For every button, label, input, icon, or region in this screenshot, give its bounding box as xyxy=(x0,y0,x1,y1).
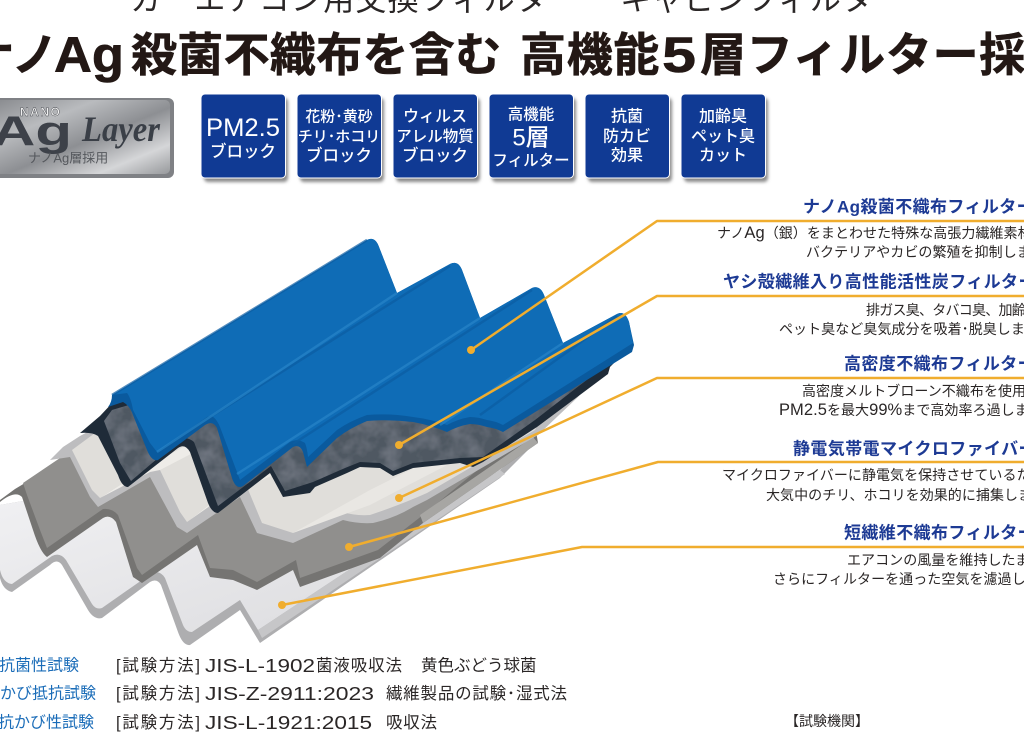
badge: odor: 加齢臭 xyxy=(699,106,747,126)
testing organization label: 【試験機関】 xyxy=(785,713,869,729)
test row 2: 繊維製品の試験･湿式法 xyxy=(386,684,567,703)
badge: pollen: 花粉･黄砂 xyxy=(305,108,373,126)
filter illustration xyxy=(0,239,634,645)
test list xyxy=(0,656,567,733)
layer 5: short fiber nonwoven xyxy=(0,446,530,645)
badge: pollen: チリ･ホコリ xyxy=(298,128,380,146)
badge: five layers xyxy=(489,94,576,182)
title: 殺菌不織布を含む xyxy=(131,29,501,81)
subtitle xyxy=(130,0,906,18)
callout: nano Ag nonwoven xyxy=(717,198,1024,260)
callout: high density: 高密度メルトブローン不織布を使用 xyxy=(802,383,1024,399)
test row 1: 抗菌性試験 xyxy=(0,656,79,674)
badge: antibacterial xyxy=(585,94,672,182)
badge: Nano Ag Layer silver plate: ナノAg層採用 xyxy=(28,150,108,166)
title: 5 xyxy=(662,27,696,83)
test row 1: [試験方法] xyxy=(116,656,200,675)
layer 1: nano Ag nonwoven xyxy=(108,239,634,487)
callout: microfiber xyxy=(722,440,1024,503)
badge: Nano Ag Layer silver plate xyxy=(0,98,174,178)
test row 1 xyxy=(0,656,536,676)
badge: five layers: 5層 xyxy=(512,124,550,152)
callout: activated carbon xyxy=(723,272,1024,337)
badge: Nano Ag Layer silver plate: Layer xyxy=(81,109,161,149)
test row 3: [試験方法] xyxy=(116,713,200,732)
badge: odor xyxy=(681,94,768,182)
callout: short fiber xyxy=(773,524,1024,587)
layer 3: high density nonwoven xyxy=(50,340,600,543)
leader line 1 xyxy=(467,221,1024,354)
test row 1: 黄色ぶどう球菌 xyxy=(421,656,536,675)
test row 1: 菌液吸収法 xyxy=(316,656,402,675)
test row 2 xyxy=(0,684,567,704)
test row 2: [試験方法] xyxy=(116,684,200,703)
badge: odor: ペット臭 xyxy=(691,126,755,146)
layer 2: activated carbon xyxy=(80,320,632,513)
badge: virus: ウィルス xyxy=(403,108,467,126)
title xyxy=(0,27,1024,83)
badge: virus: アレル物質 xyxy=(396,128,474,146)
badge: Nano Ag Layer silver plate: NANO xyxy=(20,105,61,119)
badge: virus: ブロック xyxy=(402,145,468,165)
badge: virus xyxy=(393,94,480,182)
leader line 4 xyxy=(345,462,1024,551)
test row 3: 抗かび性試験 xyxy=(0,714,94,732)
feature badges xyxy=(201,94,768,182)
test row 1: JIS-L-1902 xyxy=(205,656,315,676)
test row 3 xyxy=(0,713,437,733)
title: Ag xyxy=(54,27,124,83)
badge: antibacterial: 防カビ xyxy=(603,128,651,146)
leader line 5 xyxy=(278,547,1024,609)
badge: antibacterial: 抗菌 xyxy=(611,108,643,126)
badge: five layers: フィルター xyxy=(492,152,570,170)
badge: antibacterial: 効果 xyxy=(611,146,643,164)
test row 3: JIS-L-1921:2015 xyxy=(205,713,372,733)
leader line 3 xyxy=(395,378,1024,502)
badge: PM2.5 xyxy=(201,94,288,182)
title: 高機能 xyxy=(520,29,660,81)
leader line 2 xyxy=(395,296,1024,449)
callout: high density xyxy=(779,354,1024,419)
badge: pollen xyxy=(297,94,384,182)
badge: pollen: ブロック xyxy=(306,145,372,165)
badge: five layers: 高機能 xyxy=(508,106,555,124)
test row 2: JIS-Z-2911:2023 xyxy=(205,684,374,704)
badge: odor: カット xyxy=(699,146,747,164)
test row 2: かび抵抗試験 xyxy=(0,684,96,702)
callout: nano Ag nonwoven: ナノAg（銀）をまとわせた特殊な高張力繊維素材 xyxy=(717,224,1024,242)
badge: PM2.5: ブロック xyxy=(210,141,276,161)
badge: PM2.5: PM2.5 xyxy=(206,114,280,142)
test row 3: 吸収法 xyxy=(386,713,437,732)
layer 4: microfiber xyxy=(0,420,538,590)
